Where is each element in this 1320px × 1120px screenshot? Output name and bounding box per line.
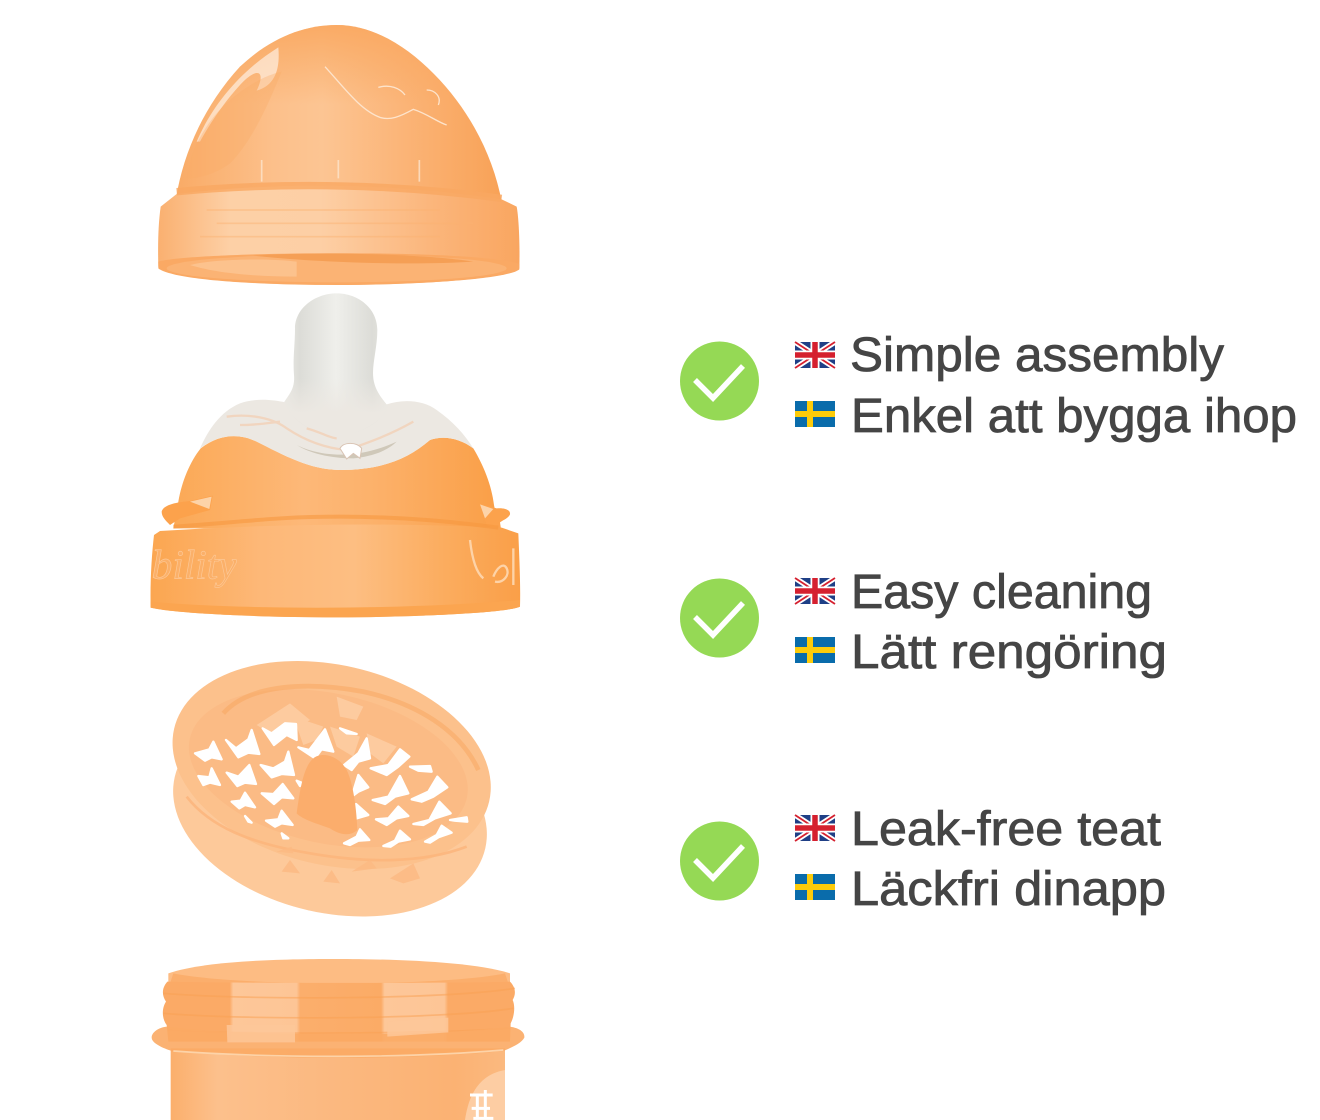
disc center peg bbox=[297, 755, 357, 834]
flange highlight bbox=[173, 1050, 503, 1056]
rim inner lip bbox=[168, 973, 510, 988]
collar tab highlights bbox=[190, 497, 493, 518]
icon: UK flag bbox=[795, 342, 835, 368]
cap opening bbox=[167, 254, 507, 282]
bottle body top bbox=[152, 959, 524, 1120]
icon: Swedish flag bbox=[795, 874, 835, 900]
disc inner rim shade bbox=[223, 686, 478, 770]
collar dome bbox=[173, 436, 498, 528]
check badge bbox=[680, 342, 759, 420]
check badge bbox=[680, 578, 759, 658]
disc front ring band bbox=[187, 797, 467, 860]
collar ring bbox=[151, 525, 520, 617]
silicone teat bbox=[284, 293, 388, 435]
teat and collar bbox=[151, 293, 520, 617]
cap band streaks bbox=[200, 210, 473, 237]
collar side tabs bbox=[162, 496, 510, 533]
cap band edge bbox=[177, 186, 502, 198]
teat valve bbox=[340, 443, 362, 459]
collar ring upper edge bbox=[173, 517, 498, 528]
disc lower rim bbox=[152, 679, 508, 946]
swedish label: Lätt rengöring bbox=[851, 626, 1167, 679]
cap underside bbox=[158, 253, 519, 285]
swedish label: Enkel att bygga ihop bbox=[851, 390, 1297, 443]
cap dome bbox=[176, 25, 502, 202]
cap threaded band bbox=[158, 186, 520, 285]
feature: simple assembly bbox=[680, 329, 1297, 443]
disc scale pattern light bbox=[257, 697, 397, 763]
check badge bbox=[680, 822, 759, 900]
icon: Swedish flag bbox=[795, 401, 835, 427]
bottle body side glare bbox=[465, 1070, 505, 1120]
flange inner shadow bbox=[297, 442, 397, 458]
cap inner reflection bbox=[190, 259, 297, 277]
threaded neck bbox=[163, 982, 515, 1042]
cap glossy reflection bbox=[197, 47, 279, 142]
neck thread lines bbox=[163, 988, 515, 1033]
icon: UK flag bbox=[795, 815, 835, 841]
cap inner thread bbox=[253, 254, 473, 263]
english label: Leak-free teat bbox=[851, 803, 1161, 856]
embossed brand mark right bbox=[470, 540, 513, 585]
feature: easy cleaning bbox=[680, 566, 1167, 679]
bottle body bbox=[171, 1048, 505, 1120]
disc openings bbox=[195, 723, 467, 847]
measurement marks bbox=[470, 1090, 493, 1118]
bottle rim bbox=[168, 959, 510, 988]
cap vertical highlights bbox=[262, 160, 419, 182]
disc inner plate bbox=[174, 666, 482, 871]
icon: Swedish flag bbox=[795, 637, 835, 663]
cap emboss lines bbox=[325, 67, 447, 125]
english label: Simple assembly bbox=[850, 329, 1224, 382]
cap side emboss bbox=[187, 72, 282, 178]
collar ring bottom lip bbox=[151, 600, 520, 617]
embossed brand text left: bility bbox=[152, 542, 237, 588]
neck flange bbox=[152, 1027, 524, 1058]
disc outer ring bbox=[152, 631, 512, 899]
neck highlight panels bbox=[227, 1018, 448, 1042]
english label: Easy cleaning bbox=[851, 566, 1152, 619]
bottle cap bbox=[158, 25, 520, 285]
flange inner details bbox=[227, 416, 413, 450]
teat base fade bbox=[284, 293, 388, 435]
cap dome upper shading bbox=[176, 25, 502, 202]
silicone flange bbox=[200, 400, 473, 470]
anti-colic disc bbox=[152, 631, 512, 946]
disc front scale marks bbox=[277, 847, 420, 883]
feature: leak-free teat bbox=[680, 803, 1166, 916]
swedish label: Läckfri dinapp bbox=[851, 863, 1166, 916]
icon: UK flag bbox=[795, 578, 835, 604]
